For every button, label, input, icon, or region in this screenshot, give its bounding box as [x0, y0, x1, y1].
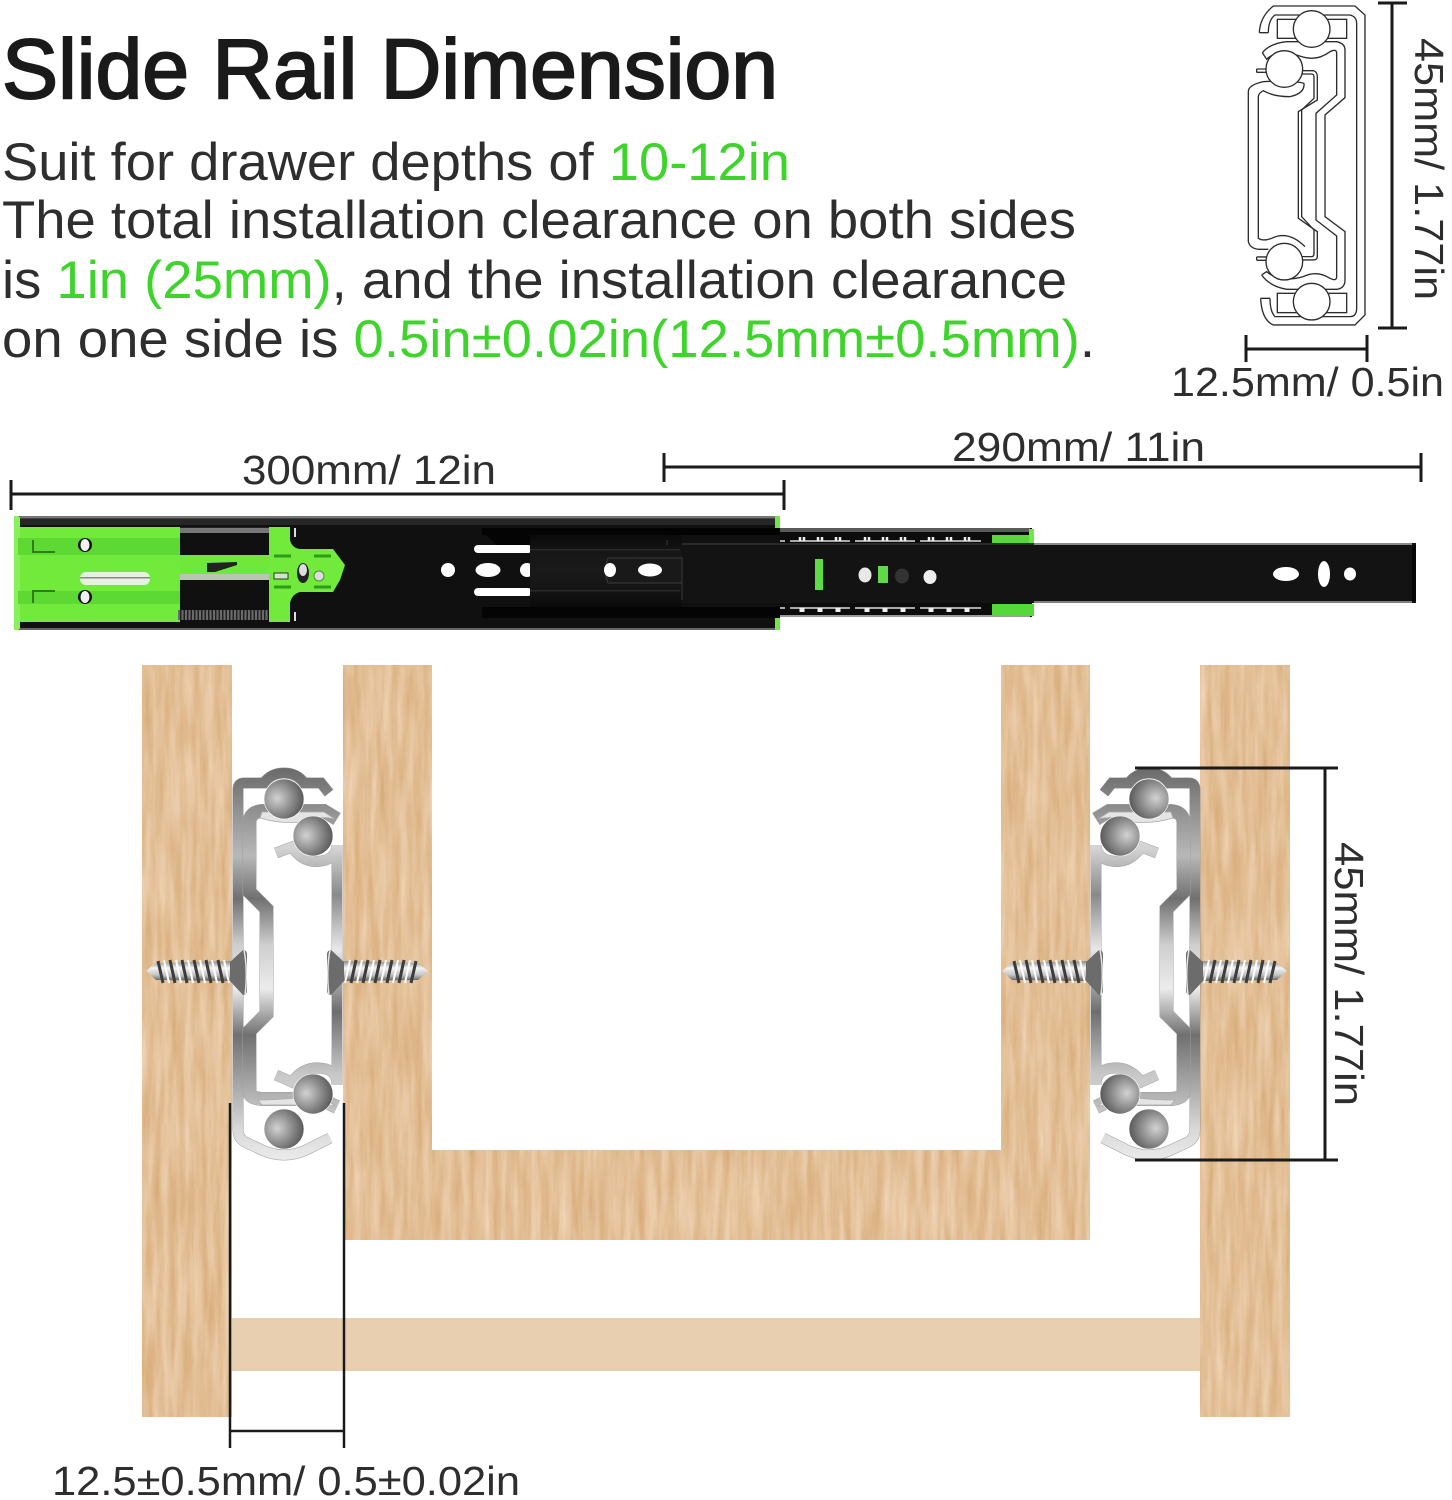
text line: clearance value: is 1in (25mm), and the installation clearance: [2, 251, 1067, 310]
label: cross-section height: 45mm/ 1.77in: [1406, 38, 1452, 300]
label: cross-section width: 12.5mm/ 0.5in: [1171, 359, 1444, 405]
drawer box: [343, 665, 1090, 1240]
cabinet back panel: [232, 1318, 1200, 1371]
right screw: drawer side: [1002, 950, 1103, 995]
dimension: cross-section width: [1246, 335, 1367, 362]
text block: description: [2, 133, 1095, 369]
center slider block: [530, 535, 682, 607]
wood: cabinet and drawer panels: [142, 665, 1290, 1417]
label: 300mm: 300mm/ 12in: [242, 447, 496, 493]
label: rail height: 45mm/ 1.77in: [1326, 842, 1372, 1106]
dimension: closed length 300mm: [11, 480, 784, 510]
outer member: [14, 516, 780, 630]
right screw: cabinet side: [1186, 950, 1287, 995]
cross-section line drawing: [1248, 6, 1365, 325]
label: 290mm: 290mm/ 11in: [952, 424, 1205, 470]
text line: drawer depth: Suit for drawer depths of 10-12in: [2, 133, 790, 192]
dimension: extension 290mm: [664, 453, 1421, 482]
middle member: [660, 528, 1034, 617]
dimension: rail height: [1135, 768, 1338, 1160]
text line: total clearance: The total installation clearance on both sides: [2, 191, 1076, 250]
slide rail product photo: [14, 516, 1416, 630]
left screw: drawer side: [327, 950, 428, 995]
title: Slide Rail Dimension: [2, 22, 778, 116]
right slide rail cross-section: [1096, 773, 1195, 1155]
inner member: [667, 543, 1416, 603]
cabinet right side: [1200, 665, 1290, 1417]
left screw: cabinet side: [146, 950, 247, 995]
text line: one side clearance: on one side is 0.5in±0.02in(12.5mm±0.5mm) .: [2, 310, 1095, 369]
left slide rail cross-section: [238, 773, 337, 1155]
green soft-close mechanism: [14, 516, 345, 630]
cabinet left side: [142, 665, 232, 1417]
dimension: side clearance: [230, 1103, 344, 1448]
dimension: cross-section height: [1378, 3, 1407, 328]
